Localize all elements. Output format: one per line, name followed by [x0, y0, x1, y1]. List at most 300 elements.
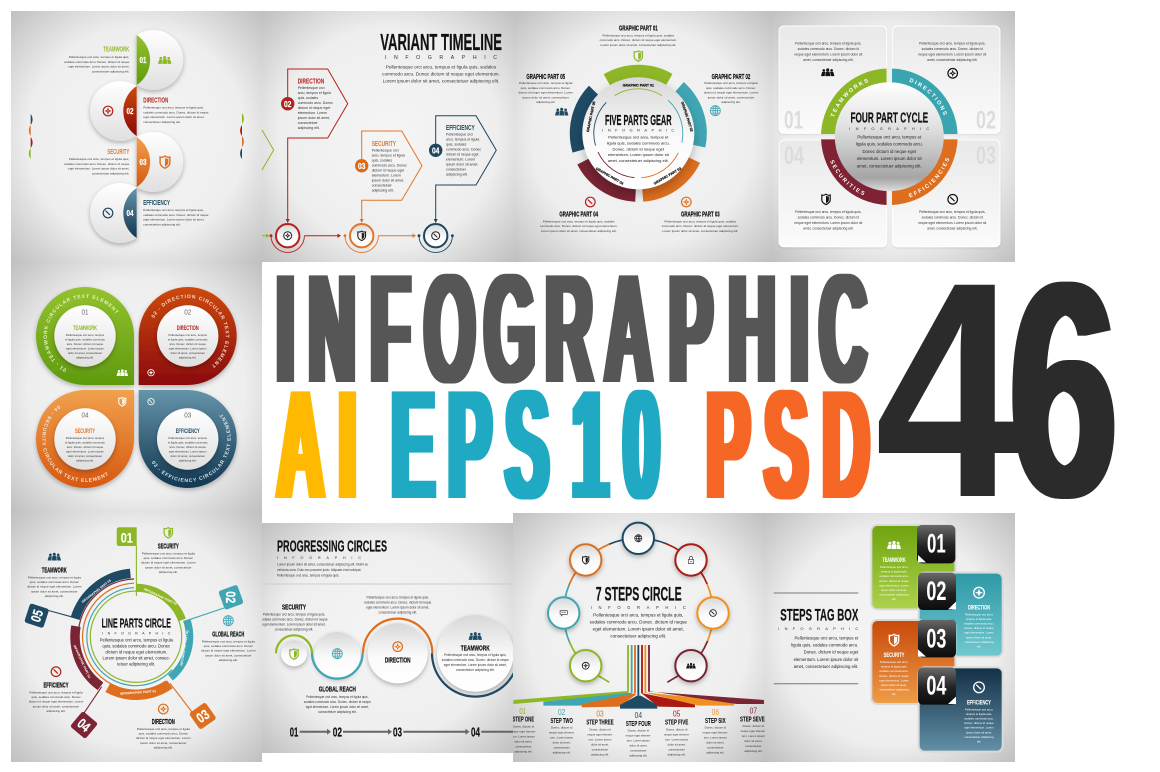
- ring labels: GRAPHIC PART 05: [586, 101, 596, 132]
- text: efficiency: [143, 198, 209, 226]
- step arrows: 01: [290, 725, 298, 740]
- teardrop 03 efficiency: eget elementum. Lorem ipsum: [169, 450, 207, 454]
- step 06: adipiscing elit.: [706, 751, 725, 755]
- paragraph: eget elementum. Lorem ipsum dolor sit amet,: [593, 626, 684, 632]
- card text 01: neque eget elementum. Lorem ipsum dolor sit: [794, 52, 862, 56]
- node: lock: [675, 544, 707, 576]
- block: global reach: quis, sodales commodo arcu. Donec: [204, 644, 253, 648]
- tag 02: 02: [223, 591, 239, 603]
- teardrop 01 teamwork: Pellentesque orci arcu, tempus: [66, 333, 105, 337]
- block: global reach: GLOBAL REACH: [212, 629, 244, 638]
- tag 01: 01: [927, 528, 946, 558]
- icon: clock: [948, 194, 958, 204]
- navy content: Pellentesque orci arcu,: [965, 707, 993, 711]
- green content: sodales commodo arcu.: [879, 574, 909, 578]
- step 02 direction: Pellentesque orci: [298, 86, 325, 90]
- block: direction: quis, sodales commodo arcu. Donec: [139, 732, 188, 736]
- part 02 block: quis, sodales commodo arcu. Donec.: [706, 86, 756, 90]
- node: chat: [548, 597, 579, 629]
- step 03: neque eget elemen-: [587, 732, 613, 736]
- teardrop 01 teamwork: eget elementum. Lorem ipsum: [66, 346, 105, 350]
- security text: Pellentesque orci arcu, tempus et ligula quis,: [263, 612, 325, 616]
- teal content: tempus et ligula quis,: [966, 617, 992, 621]
- card text 04: amet, consectetuer adipiscing elit.: [803, 226, 854, 230]
- centre paragraph: amet, consectetuer adipiscing elit.: [857, 163, 922, 168]
- paragraph: consectetuer adipiscing elit.: [610, 634, 666, 638]
- timeline node 04: [418, 224, 454, 252]
- direction upper text: eget elementum. Lorem ipsum dolor sit amet,: [366, 606, 429, 610]
- text: security: consectetuer adipiscing elit.: [92, 171, 129, 175]
- orange content: SECURITY: [884, 652, 905, 659]
- big card numbers: [784, 106, 996, 170]
- part 02 block: [704, 72, 759, 116]
- teardrop 01 teamwork: 01: [82, 308, 88, 316]
- teal content: Pellentesque orci arcu,: [965, 612, 993, 616]
- teardrop 02 direction: [136, 286, 239, 390]
- green content: consectetuer adipiscing: [879, 593, 909, 597]
- green content: Pellentesque orci arcu,: [880, 565, 908, 569]
- step 02: STEP TWO: [550, 716, 573, 725]
- part 05 block: adipiscing elit.: [536, 100, 555, 104]
- step 03: consectetuer: [592, 747, 608, 751]
- band labels: INFOGRAPHIC PART 02: [179, 630, 190, 666]
- block: global reach: Pellentesque orci arcu, tempus et ligula: [202, 640, 255, 644]
- step 01: STEP ONE: [512, 715, 534, 724]
- centre paragraph: quis, sodales commodo arcu. Donec: [102, 644, 170, 648]
- big card numbers: 02: [976, 106, 996, 134]
- block: global reach: [201, 616, 256, 662]
- teardrop 03 efficiency: 03 - EFFICIENCY CIRCULAR TEXT ELEMENT: [152, 414, 231, 482]
- part 01 block: Lorem ipsum dolor sit amet, consectetuer adipiscing elit.: [600, 43, 676, 47]
- step 03 security: elementum. Lorem: [372, 174, 401, 178]
- orange content: Pellentesque orci arcu,: [880, 660, 908, 664]
- direction upper text: consectetuer adipiscing elit.: [378, 610, 417, 614]
- connecting arcs: [564, 539, 712, 683]
- step 07: STEP SEVEN: [740, 714, 768, 723]
- step 04: dolor sit amet,: [629, 744, 648, 748]
- card text 02: neque eget elementum. Lorem ipsum dolor sit: [918, 52, 986, 56]
- step 03 security: arcu, tempus et ligula: [372, 154, 405, 158]
- step 03: [586, 710, 614, 756]
- text: efficiency: sodales commodo arcu. Donec. dictum id neque: [143, 213, 209, 217]
- step 06: tum. Lorem ipsum: [704, 736, 727, 740]
- teardrop 04 security: eget elementum. Lorem ipsum: [66, 450, 105, 454]
- security text: [260, 602, 328, 632]
- teardrop 02 direction: 02: [184, 308, 191, 316]
- text: efficiency: EFFICIENCY: [143, 198, 170, 207]
- text: security: [64, 147, 130, 175]
- headline: 46: 4: [875, 219, 1022, 562]
- step 03 security: ipsum dolor sit amet,: [372, 179, 404, 183]
- step 02: consectetuer: [553, 746, 570, 750]
- block: efficiency: Pellentesque orci arcu, tempus et ligula: [29, 690, 83, 694]
- step arrows: 03: [393, 725, 402, 740]
- step 03 security: Pellentesque orci: [372, 149, 399, 153]
- step 06: neque eget elemen-: [703, 731, 728, 735]
- part 02 block: GRAPHIC PART 02: [712, 72, 750, 81]
- curved labels: SECURITIES: [830, 160, 864, 195]
- step 03: dolor sit amet,: [591, 742, 609, 746]
- step 02: neque eget elemen-: [549, 731, 574, 735]
- teardrop 03 efficiency: 03: [184, 410, 191, 420]
- circle 3 direction: DIRECTION: [385, 655, 411, 664]
- step 04 efficiency: commodo arcu. Donec: [446, 148, 481, 152]
- teardrop 01 teamwork: TEAMWORK: [73, 325, 97, 332]
- subtitle: INFOGRAPHIC: [778, 626, 858, 631]
- teardrop 04 security: Pellentesque orci arcu, tempus: [66, 436, 105, 440]
- global reach text: GLOBAL REACH: [319, 685, 356, 694]
- block: direction: Pellentesque orci arcu, tempus et ligula: [137, 727, 190, 731]
- big card numbers: 04: [784, 142, 804, 170]
- block: efficiency: dictum id neque eget elementum. Lorem: [29, 700, 84, 704]
- tag 03: 03: [926, 623, 946, 653]
- part 05 block: GRAPHIC PART 05: [526, 72, 565, 81]
- part 02 block: dictum id neque eget elementum. Lorem: [704, 91, 759, 95]
- block: direction: dictum id neque eget elementum. Lorem: [136, 736, 191, 740]
- text: teamwork: eget elementum. Lorem ipsum dolor sit amet,: [68, 65, 129, 69]
- step 03: adipiscing elit.: [591, 752, 609, 756]
- icon: compass: [948, 68, 958, 78]
- step 02: tum. Lorem ipsum: [550, 736, 574, 740]
- step 05: adipiscing elit.: [668, 752, 686, 756]
- teardrop 03 efficiency: EFFICIENCY: [176, 428, 200, 435]
- paragraph: sodales commodo arcu. Donec. dictum id neque: [590, 620, 687, 624]
- box: green: [871, 525, 955, 609]
- step 04: adipiscing elit.: [629, 754, 648, 758]
- orange content: consectetuer adipiscing: [879, 688, 909, 692]
- tag 04: [918, 667, 956, 705]
- teardrop 02 direction: Pellentesque orci arcu, tempus: [168, 333, 207, 337]
- block: direction: ipsum dolor sit amet, consectetuer: [140, 741, 187, 745]
- step 02: dolor sit amet,: [553, 741, 571, 745]
- panel: 7 steps circle: [511, 507, 768, 762]
- step 03 security: [355, 131, 422, 223]
- teal content: eget elementum. Lorem: [964, 631, 994, 635]
- step 05: neque eget elemen-: [664, 732, 689, 736]
- ring quadrants: [821, 68, 958, 205]
- centre paragraph: Pellentesque orci arcu, tempus et: [857, 134, 922, 140]
- curved labels: EFFICIENCIES: [908, 158, 949, 198]
- teardrop 02 direction: DIRECTION: [177, 325, 199, 332]
- big card numbers: 03: [976, 142, 996, 170]
- intro paragraph: vehicula urna. Duis nec posuere justo. Aliquam erat volutpat.: [277, 568, 361, 572]
- step 02 direction: [281, 69, 348, 223]
- step 04 efficiency: quis, sodales: [446, 143, 467, 147]
- curved labels: DIRECTIONS: [909, 78, 947, 115]
- paragraph: Pellentesque orci arcu, tempus et ligula quis,: [593, 612, 683, 618]
- navy content: [964, 682, 994, 744]
- circle 01 teamwork: [137, 30, 183, 90]
- panel: four-step vertical circles: [11, 11, 262, 262]
- part 03 block: GRAPHIC PART 03: [681, 210, 720, 219]
- block: direction: DIRECTION: [152, 717, 175, 726]
- curved bands: [51, 551, 221, 722]
- part 02 block: adipiscing elit.: [721, 100, 741, 104]
- paragraph: amet, consectetuer adipiscing elit.: [794, 664, 858, 669]
- text: teamwork: sodales commodo arcu. Donec. dictum id neque: [64, 60, 130, 64]
- centre title: FIVE PARTS GEAR: [605, 113, 672, 129]
- title: STEPS TAG BOX: [780, 606, 859, 625]
- curved labels: TEAMWORKS: [830, 78, 868, 116]
- node: compass: [570, 650, 601, 681]
- intro paragraph: Lorem ipsum dolor sit amet, consectetuer adipiscing elit.: [383, 78, 499, 83]
- band labels: [72, 578, 190, 696]
- centre disc: [835, 82, 944, 191]
- step 01: dolor sit amet,: [514, 739, 533, 743]
- headline: 46: 6: [1009, 219, 1117, 562]
- tag 04: 04: [926, 671, 946, 701]
- tag 05: 05: [27, 607, 46, 624]
- teardrop 01 teamwork: 01 - TEAMWORK CIRCULAR TEXT ELEMENT: [44, 294, 119, 372]
- panel: progressing circles: [260, 523, 519, 761]
- part 05 block: Pellentesque orci arcu, tempus et ligula: [519, 81, 573, 85]
- step 04 efficiency: elementum. Lorem: [446, 158, 475, 162]
- circle 03 security: [137, 132, 183, 192]
- step 04 efficiency: adipiscing elit.: [446, 173, 468, 177]
- teal content: ipsum dolor sit amet,: [966, 635, 992, 639]
- part 03 block: commodo arcu. Donec. dictum id neque eget elementum.: [662, 224, 739, 228]
- panel: steps tag box: [765, 513, 1015, 762]
- step 07: neque eget elemen-: [741, 729, 766, 733]
- part 01 block: GRAPHIC PART 01: [619, 24, 658, 33]
- part 02 block: Pellentesque orci arcu, tempus et ligula: [704, 81, 758, 85]
- tag boxes: [871, 525, 1003, 752]
- subtitle: INFOGRAPHIC: [385, 55, 497, 61]
- part 04 block: commodo arcu. Donec. dictum id neque eget elementum.: [540, 224, 618, 228]
- step 06: [703, 708, 728, 755]
- text: security: eget elementum. Lorem ipsum dolor sit amet,: [68, 167, 129, 171]
- step 03: STEP THREE: [586, 718, 614, 727]
- block: security: dictum id neque eget elementum. Lorem: [141, 561, 196, 565]
- step 04: tum. Lorem ipsum: [627, 739, 650, 743]
- step 03: 03: [596, 710, 604, 719]
- paragraph: Donec. dictum id neque eget: [804, 650, 859, 655]
- step arrows: [290, 727, 513, 737]
- intro paragraph: commodo arcu. Donec dictum id neque eget elementum.: [382, 71, 500, 76]
- step 07: 07: [750, 706, 757, 715]
- ring labels: [586, 84, 694, 186]
- card text 02: sodales commodo arcu. Donec. dictum id: [922, 47, 983, 51]
- centre title: FOUR PART CYCLE: [850, 111, 928, 127]
- paragraph: Pellentesque orci arcu, tempus et: [795, 636, 859, 640]
- green content: [879, 541, 909, 601]
- teardrop 02 direction: adipiscing elit.: [179, 356, 197, 360]
- part 02 block: ipsum dolor sit amet, consectetuer: [708, 95, 754, 99]
- security text: eget elementum. Lorem ipsum dolor sit amet,: [262, 622, 326, 626]
- timeline node 03: [344, 224, 416, 252]
- block: efficiency: EFFICIENCY: [44, 680, 69, 689]
- text: direction: consectetuer adipiscing elit.: [143, 120, 181, 124]
- step 07: consectetuer: [745, 744, 762, 748]
- icon: team: [821, 68, 834, 76]
- part 04 block: Pellentesque orci arcu, tempus et ligula quis, sodales: [543, 220, 615, 224]
- circle 03 security: 03: [140, 158, 147, 167]
- headline: 46: [875, 219, 1117, 562]
- block: teamwork: [27, 553, 82, 598]
- thin inner arcs: [575, 70, 701, 196]
- headline: AI: AI: [277, 358, 356, 532]
- step 06: Donec. dictum id: [705, 726, 726, 730]
- block: teamwork: TEAMWORK: [42, 565, 67, 574]
- node: shield: [570, 544, 601, 576]
- circle 02 direction: 02: [126, 107, 134, 116]
- teardrop 04 security: SECURITY: [75, 428, 95, 435]
- block: security: SECURITY: [158, 541, 179, 550]
- block: efficiency: ipsum dolor sit amet, consectetuer: [33, 704, 79, 708]
- concentric lines: [78, 579, 182, 690]
- step 01: 01: [519, 707, 526, 716]
- circle 3 direction: [363, 619, 432, 683]
- green content: Donec. dictum id neque: [879, 579, 909, 583]
- step 06: STEP SIX: [705, 716, 726, 725]
- block: efficiency: [29, 667, 84, 713]
- step 05: Donec. dictum id: [666, 727, 688, 731]
- text: direction: sodales commodo arcu. Donec. dictum id neque: [143, 110, 209, 114]
- text: security: sodales commodo arcu. Donec. dictum id neque: [64, 162, 130, 166]
- card text 01: sodales commodo arcu. Donec. dictum id: [798, 47, 859, 51]
- step 04: neque eget elemen-: [626, 734, 651, 738]
- teardrop 04 security: arcu. Donec. dictum id neque: [67, 445, 104, 449]
- step 07: tum. Lorem ipsum: [742, 734, 765, 738]
- navy content: eget elementum. Lorem: [964, 726, 994, 730]
- step 03 security: dictum id neque eget: [372, 169, 404, 173]
- navy content: elit.: [977, 740, 981, 744]
- panel: variant timeline: [262, 11, 515, 262]
- step arrows: 04: [471, 725, 480, 740]
- card text 01: amet, consectetuer adipiscing elit.: [803, 58, 854, 62]
- subtitle: INFOGRAPHIC: [591, 605, 686, 610]
- ring labels: GRAPHIC PART 04: [595, 167, 624, 186]
- teardrop 03 efficiency: arcu. Donec. dictum id neque: [170, 445, 206, 449]
- teal content: sodales commodo arcu.: [964, 622, 994, 626]
- centre paragraph: Lorem ipsum dolor sit amet, consec-: [103, 656, 171, 660]
- orange content: sodales commodo arcu.: [879, 669, 909, 673]
- step 04 efficiency: [429, 116, 496, 223]
- step 03 security: consectetuer: [372, 184, 393, 188]
- panel: five parts gear: [515, 11, 771, 262]
- part 01 block: commodo arcu. Donec. dictum id neque eget elementum.: [600, 38, 677, 42]
- tag 01: 01: [121, 530, 133, 546]
- teal content: consectetuer adipiscing: [964, 640, 994, 644]
- step 01: neque eget elemen-: [511, 729, 536, 733]
- step 02 direction: quis, sodales: [298, 96, 318, 100]
- navy content: tempus et ligula quis,: [966, 712, 992, 716]
- card text 03: neque eget elementum. Lorem ipsum dolor sit: [918, 221, 986, 225]
- circle 4 teamwork: TEAMWORK: [461, 643, 490, 652]
- block: teamwork: ipsum dolor sit amet, consectetuer: [31, 589, 78, 593]
- text: teamwork: consectetuer adipiscing elit.: [92, 69, 129, 73]
- circle 4 teamwork: sodales commodo arcu. Donec. dictum id neque: [442, 658, 509, 662]
- step 01: [513, 708, 536, 753]
- step 02 direction: adipiscing elit.: [298, 126, 320, 130]
- title: 7 STEPS CIRCLE: [596, 584, 682, 606]
- global reach text: sodales commodo arcu. Donec. dictum id neque: [304, 700, 371, 704]
- orange content: [879, 634, 909, 696]
- step 02 direction: dictum id neque eget: [298, 106, 330, 110]
- centre title: LINE PARTS CIRCLE: [102, 616, 171, 631]
- step 07: [740, 708, 765, 752]
- box: navy: [919, 667, 1003, 752]
- cards: [779, 26, 1000, 247]
- block: global reach: ipsum dolor sit amet, consectetuer: [205, 653, 252, 657]
- tag 04: [70, 711, 98, 739]
- intro paragraph: Pellentesque orci arcu, tempus et ligula quis.: [277, 574, 339, 578]
- centre paragraph: ligula quis, sodales commodo arcu.: [607, 140, 670, 145]
- step 05: STEP FIVE: [665, 718, 688, 727]
- teardrop 02 direction: 02 - DIRECTION CIRCULAR TEXT ELEMENT: [152, 294, 230, 368]
- card text 02: Pellentesque orci arcu, tempus et ligula quis,: [919, 42, 986, 46]
- step 02 direction: 02: [284, 99, 292, 109]
- step 04 efficiency: Pellentesque orci: [446, 133, 473, 137]
- teardrop 03 efficiency: [136, 390, 239, 492]
- part 03 block: [662, 197, 739, 233]
- teal content: [964, 587, 994, 649]
- text: direction: DIRECTION: [143, 96, 168, 105]
- global reach text: Pellentesque orci arcu, tempus et ligula quis,: [306, 695, 369, 699]
- step 02 direction: elementum. Lorem: [298, 111, 327, 115]
- centre paragraph: elementum. Lorem ipsum dolor sit: [857, 156, 922, 161]
- card text 04: Pellentesque orci arcu, tempus et ligula quis,: [795, 210, 862, 214]
- centre paragraph: elementum. Lorem ipsum dolor sit: [608, 152, 670, 157]
- step 04 efficiency: 04: [432, 145, 440, 155]
- circle 01 teamwork: 01: [140, 56, 147, 65]
- step 03 security: SECURITY: [372, 139, 396, 148]
- step 03: tum. Lorem ipsum: [589, 737, 612, 741]
- step 03 security: commodo arcu. Donec: [372, 164, 407, 168]
- step 02: adipiscing elit.: [553, 751, 571, 755]
- teardrop 02 direction: arcu. Donec. dictum id neque: [170, 342, 206, 346]
- step 03 security: quis, sodales: [372, 159, 392, 163]
- text: efficiency: Pellentesque orci arcu, tempus et ligula quis,: [143, 208, 204, 212]
- tag 01: [117, 527, 137, 546]
- navy content: sodales commodo arcu.: [964, 717, 994, 721]
- part 05 block: dictum id neque eget elementum. Lorem: [518, 91, 573, 95]
- green content: TEAMWORK: [882, 557, 906, 564]
- part 03 block: Pellentesque orci arcu, tempus et ligula quis, sodales: [664, 220, 737, 224]
- circle 04 efficiency: [90, 183, 137, 243]
- step 06: dolor sit amet,: [706, 741, 725, 745]
- green content: ipsum dolor sit amet,: [881, 588, 907, 592]
- step 02 direction: consectetuer: [298, 121, 319, 125]
- tag 04: 04: [74, 715, 94, 735]
- step 05: 05: [673, 710, 681, 719]
- title: PROGRESSING CIRCLES: [277, 539, 387, 556]
- step 03 security: 03: [358, 161, 366, 171]
- orange content: ipsum dolor sit amet,: [881, 683, 907, 687]
- circle 04 efficiency: 04: [126, 209, 134, 218]
- teardrop 01 teamwork: arcu. Donec. dictum id neque: [67, 342, 104, 346]
- text: direction: eget elementum. Lorem ipsum dolor sit amet,: [143, 115, 205, 119]
- teardrop 03 efficiency: et ligula quis, sodales commodo: [168, 440, 208, 444]
- circle 4 teamwork: consectetuer adipiscing elit.: [456, 668, 495, 672]
- leader lines: [47, 546, 224, 715]
- part 03 block: Lorem ipsum dolor sit amet, consectetuer adipiscing elit.: [662, 229, 738, 233]
- block: global reach: adipiscing elit.: [219, 658, 238, 662]
- gear bands: [551, 46, 725, 220]
- text: direction: Pellentesque orci arcu, tempus et ligula quis,: [143, 106, 204, 110]
- teardrop 03 efficiency: adipiscing elit.: [179, 458, 197, 462]
- step 02: [549, 708, 574, 755]
- teardrop 02 direction: dolor sit amet, consectetuer: [171, 351, 205, 355]
- circle 02 direction: [90, 81, 137, 141]
- ring labels: GRAPHIC PART 02: [680, 101, 694, 132]
- navy content: EFFICIENCY: [967, 699, 991, 706]
- band labels: INFOGRAPHIC PART 04: [72, 644, 91, 679]
- centre subtitle: INFOGRAPHIC: [602, 128, 674, 133]
- block: global reach: dictum id neque eget elementum. Lorem: [201, 649, 256, 653]
- centre paragraph: ligula quis, sodales commodo arcu.: [856, 142, 923, 147]
- circle 4 teamwork: eget elementum. Lorem ipsum dolor sit amet,: [444, 663, 507, 667]
